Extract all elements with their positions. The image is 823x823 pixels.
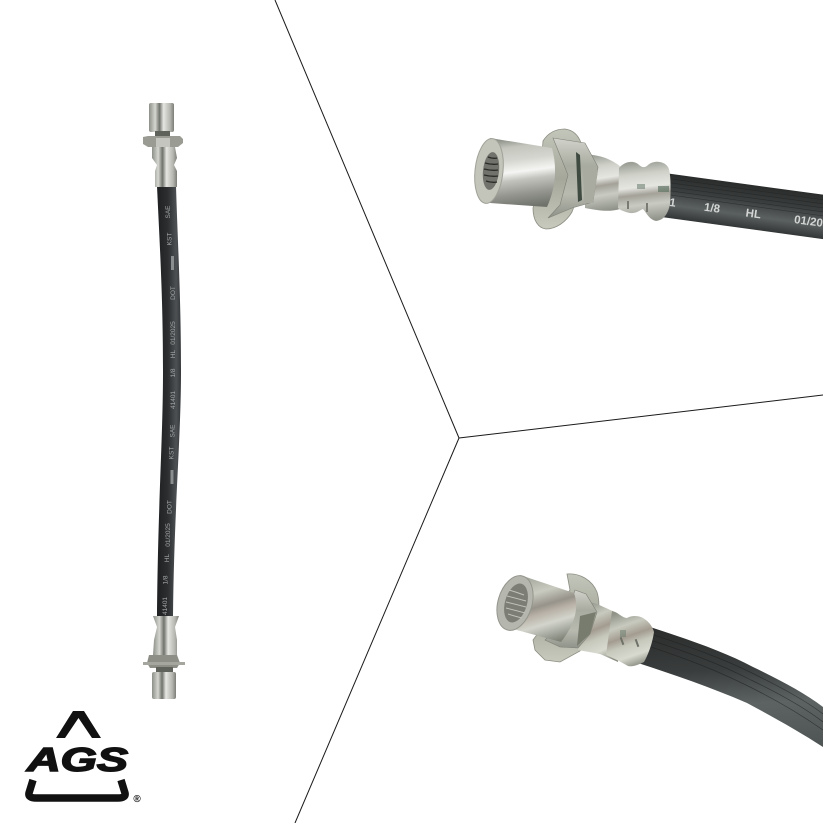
- logo bottom bracket: [29, 780, 125, 798]
- hose printed markings: KST: [166, 233, 174, 245]
- ferrule crimp marks: [620, 630, 639, 647]
- close-up hose: [661, 173, 823, 241]
- hose printed markings: 1/8: [162, 575, 170, 585]
- hose printed markings: 41401: [170, 391, 177, 409]
- hex nut: [545, 590, 597, 648]
- close-up: upper fitting: [472, 129, 823, 241]
- hex nut: [548, 138, 598, 218]
- hose markings: [669, 197, 823, 230]
- hose printed markings: DOT: [170, 286, 177, 300]
- logo wordmark: AGS: [26, 741, 128, 778]
- hose markings: 01/20: [793, 214, 823, 230]
- registered mark: ®: [133, 794, 141, 805]
- neck: [578, 600, 622, 662]
- top fitting: [143, 103, 183, 187]
- hose printed markings: 01/2025: [165, 523, 172, 547]
- hose printed markings: KST: [168, 447, 176, 459]
- hose body: [157, 186, 181, 617]
- hose markings: HL: [745, 207, 762, 221]
- flange washer: [533, 129, 581, 229]
- hose printed markings: 01/2025: [170, 321, 177, 345]
- crimp ferrule: [606, 611, 654, 666]
- hose printed markings: HL: [164, 553, 171, 562]
- hose printed markings: HL: [170, 349, 177, 358]
- hose markings: 1/8: [703, 202, 721, 216]
- hose printed markings: SAE: [165, 205, 172, 219]
- close-up: lower fitting: [491, 571, 823, 747]
- hose printed markings: DOT: [166, 500, 174, 514]
- crimp ferrule: [618, 162, 671, 221]
- logo top chevron: [56, 711, 101, 738]
- AGS logo: [26, 711, 141, 805]
- hose printed markings: 41401: [162, 597, 169, 615]
- flange washer: [533, 574, 599, 662]
- threaded cylinder: [472, 137, 555, 207]
- ferrule crimp marks: [627, 184, 669, 212]
- hose printed markings: 1/8: [170, 368, 177, 378]
- threaded cylinder: [491, 571, 576, 642]
- full brake hose: [143, 103, 185, 699]
- divider lines: [275, 0, 823, 823]
- neck: [585, 154, 622, 211]
- close-up curved hose: [638, 627, 823, 747]
- hose printed markings: [162, 205, 177, 615]
- bottom fitting: [143, 616, 185, 699]
- hose printed markings: SAE: [170, 424, 176, 438]
- hose markings: 1: [669, 197, 677, 210]
